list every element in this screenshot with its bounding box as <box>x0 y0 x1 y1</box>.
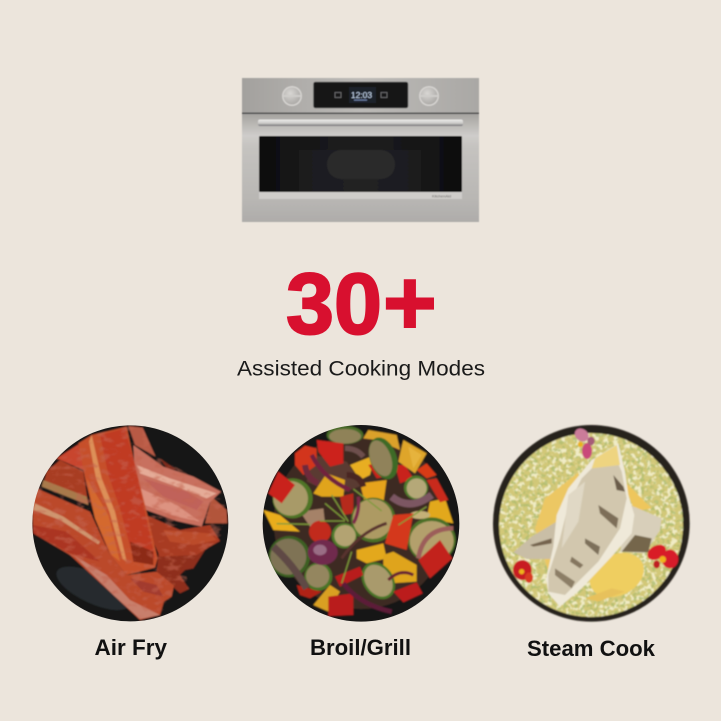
bacon texture <box>32 426 226 611</box>
heading: 30+: 30 <box>286 256 382 352</box>
control display: 12:03 <box>351 90 372 100</box>
door glass window <box>259 136 462 192</box>
heading: 30+: + <box>383 252 437 354</box>
zucchini slices <box>273 478 313 518</box>
herb sauce <box>499 433 683 617</box>
mashed potato <box>535 472 585 572</box>
control display <box>314 82 408 108</box>
rosemary sprigs <box>277 489 427 583</box>
background vegetables <box>363 430 400 450</box>
brand mark: KitchenAid <box>432 194 451 198</box>
main fish fillet <box>546 443 634 607</box>
bacon top strip <box>128 426 156 457</box>
right knob <box>419 86 439 106</box>
left knob <box>282 86 302 106</box>
red flower left <box>513 560 533 583</box>
food photo: bacon <box>32 425 228 622</box>
bacon right lower strips <box>205 497 227 523</box>
red peppers <box>268 472 295 503</box>
infographic canvas <box>32 78 691 660</box>
label: Broil/Grill: Broil/Grill <box>310 635 411 660</box>
bacon centre strip <box>78 427 158 575</box>
pan <box>493 425 690 622</box>
food photo: grilled vegetables <box>262 425 460 622</box>
bacon upper-left strip <box>57 444 87 472</box>
red onion <box>308 540 338 565</box>
label: Steam Cook: Steam Cook <box>527 636 656 661</box>
bacon lower-left strip <box>32 488 174 620</box>
red flower right <box>645 542 678 568</box>
door handle <box>258 120 463 126</box>
pink flower <box>572 426 595 459</box>
rear fish fillet <box>513 522 557 559</box>
oven illustration <box>242 78 479 222</box>
oven door <box>242 112 479 222</box>
door bottom trim <box>259 192 462 199</box>
bacon right strip <box>133 445 221 527</box>
subheading: Assisted Cooking Modes <box>237 356 485 380</box>
label: Air Fry: Air Fry <box>94 635 168 660</box>
yellow pepper top right <box>398 440 427 473</box>
food photo: steamed fish <box>492 424 691 623</box>
